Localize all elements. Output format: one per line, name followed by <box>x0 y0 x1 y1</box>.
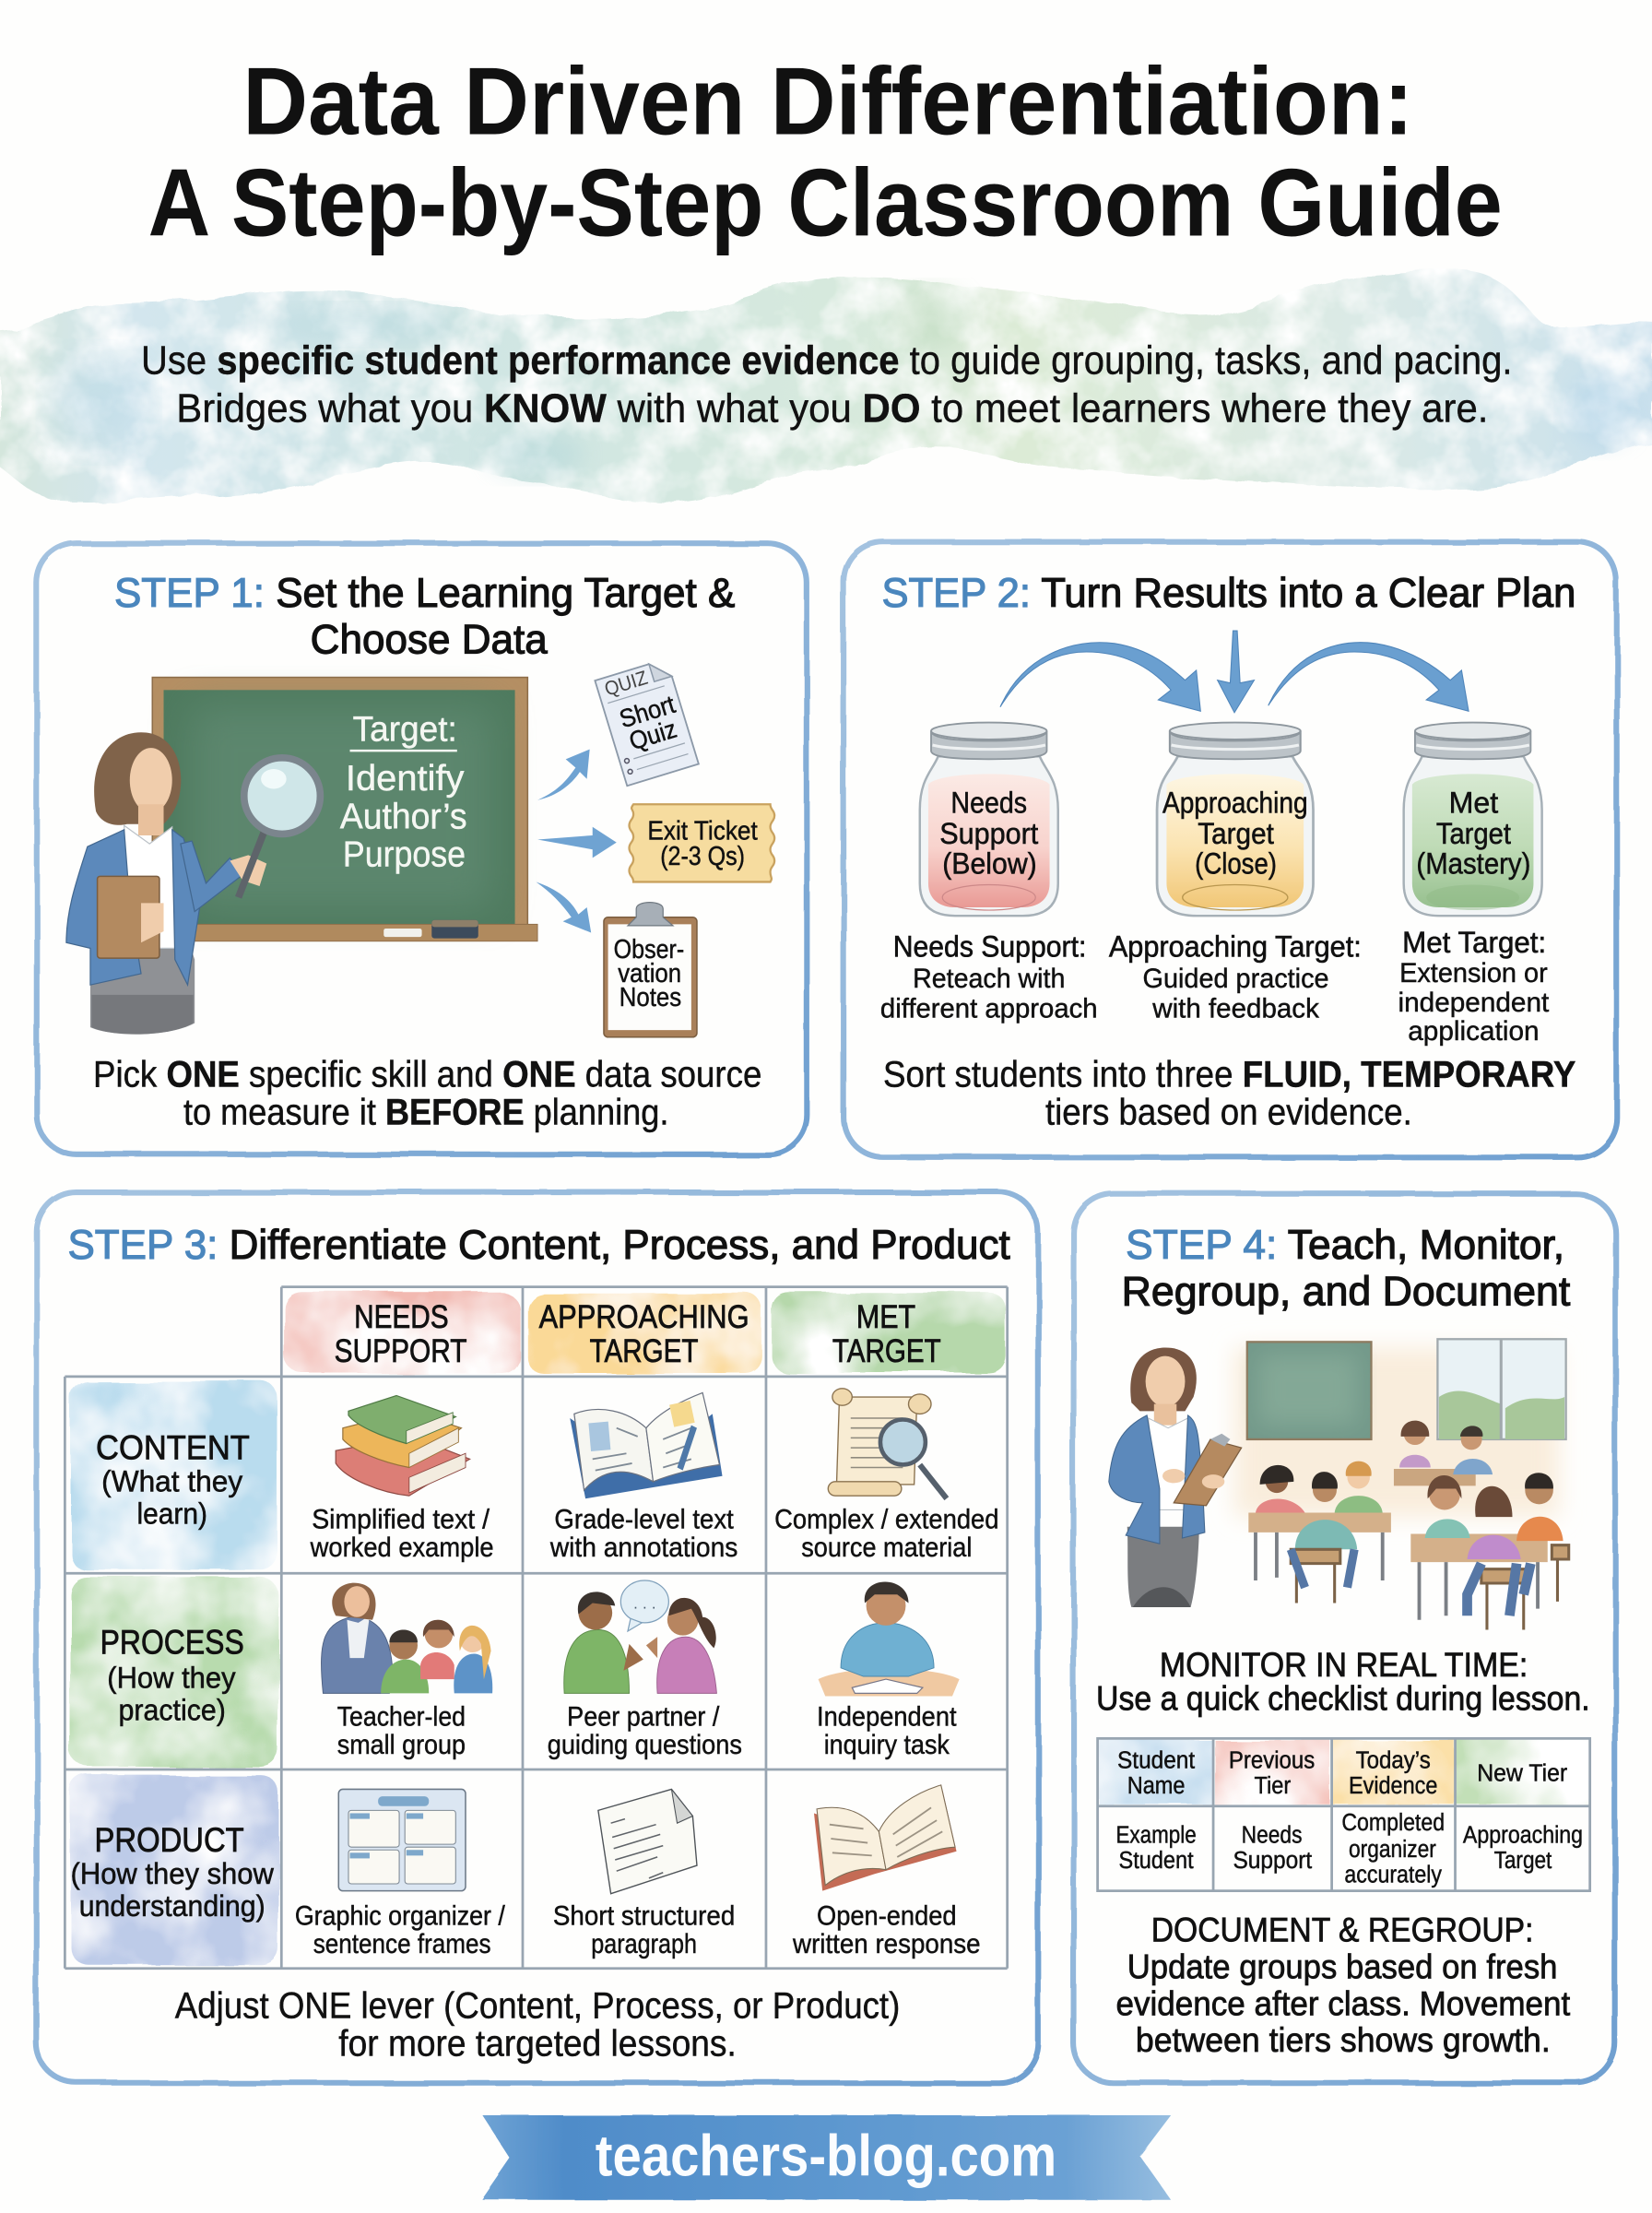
panel: step 4 <box>1074 1194 1615 2083</box>
jar: met target: Target <box>1436 817 1511 850</box>
cell captions: Grade-level text <box>554 1504 734 1534</box>
arrows between tiers <box>1000 631 1469 713</box>
arrow: to quiz <box>537 750 590 800</box>
column headers: NEEDS <box>354 1299 449 1335</box>
column headers: TARGET <box>590 1333 699 1369</box>
checklist table: Previous <box>1229 1746 1315 1773</box>
step 3 takeaway <box>175 1985 900 2065</box>
step 3 takeaway: Adjust ONE lever (Content, Process, or Product) <box>175 1985 900 2026</box>
document and regroup text: DOCUMENT & REGROUP: <box>1151 1911 1533 1949</box>
jar: needs support: Needs <box>950 786 1027 819</box>
heading: step 4 <box>1122 1223 1570 1315</box>
checklist table: Student <box>1117 1746 1196 1773</box>
cell captions: sentence frames <box>313 1929 491 1959</box>
tier description: met target: Extension or <box>1399 958 1548 988</box>
step 2 takeaway: Sort students into three FLUID, TEMPORARY <box>883 1054 1575 1095</box>
row headers: practice) <box>119 1693 226 1726</box>
row headers: understanding) <box>79 1889 266 1923</box>
checklist table: accurately <box>1344 1860 1442 1888</box>
cell captions: guiding questions <box>548 1730 742 1760</box>
checklist table: Evidence <box>1349 1771 1437 1799</box>
icon: observation notes clipboard: Obser- <box>614 934 684 964</box>
cell captions: worked example <box>310 1533 494 1563</box>
tier description: approaching target: with feedback <box>1151 993 1319 1024</box>
table: front right <box>1410 1473 1569 1630</box>
column headers: TARGET <box>832 1333 941 1369</box>
icon: graphic organizer <box>338 1789 466 1891</box>
tier description: needs support <box>880 930 1098 1024</box>
title: Data Driven Differentiation: <box>242 48 1413 155</box>
checklist table: Today’s <box>1356 1746 1431 1773</box>
panel: step 3 <box>37 1192 1038 2083</box>
icon: short quiz card: Quiz <box>626 715 680 755</box>
intro text <box>141 339 1512 432</box>
tier description: met target: application <box>1408 1016 1540 1047</box>
board text: Target: <box>353 709 457 749</box>
cell captions: source material <box>801 1533 972 1563</box>
table grid <box>65 1287 1008 1969</box>
icon: paragraph document <box>598 1789 697 1894</box>
checklist table: Example <box>1115 1821 1197 1849</box>
row headers: PROCESS <box>100 1624 244 1662</box>
heading: step 4: Regroup, and Document <box>1122 1270 1570 1315</box>
tier description: approaching target: Guided practice <box>1143 964 1329 994</box>
row headers <box>71 1381 277 1964</box>
icon: short quiz card: QUIZ <box>602 667 650 701</box>
icon: exit ticket: Exit Ticket <box>647 816 758 846</box>
heading: step 2: STEP 2: Turn Results into a Clear Plan <box>881 571 1575 616</box>
checklist table: Approaching <box>1463 1821 1583 1849</box>
icon: peer partners: ... <box>633 1595 656 1613</box>
jar: met target: Met <box>1449 786 1498 819</box>
icon: scroll with magnifier <box>828 1389 947 1498</box>
icon: teacher-led small group <box>322 1583 492 1693</box>
icon: exit ticket <box>630 804 774 882</box>
step 2 takeaway: tiers based on evidence. <box>1045 1093 1412 1133</box>
monitor heading: Use a quick checklist during lesson. <box>1096 1680 1590 1718</box>
icon: peer partners <box>564 1580 716 1693</box>
intro text: Bridges what you KNOW with what you DO to meet learners where they are. <box>176 387 1488 432</box>
icon: stacked books <box>336 1395 470 1496</box>
board text: Author’s <box>340 797 467 836</box>
title <box>148 48 1503 257</box>
cell captions: small group <box>337 1730 466 1760</box>
icon: annotated open book <box>570 1392 723 1498</box>
row headers: PRODUCT <box>95 1821 244 1859</box>
tier description: met target <box>1398 926 1550 1047</box>
cell captions: Short structured <box>553 1900 735 1931</box>
step 2 takeaway <box>883 1054 1575 1133</box>
column headers: APPROACHING <box>539 1299 749 1335</box>
chalkboard <box>152 678 537 941</box>
cell captions: Teacher-led <box>337 1702 466 1733</box>
tier description: met target: Met Target: <box>1402 926 1546 959</box>
cell captions <box>295 1504 998 1959</box>
cell captions: Graphic organizer / <box>295 1900 505 1931</box>
icon: open notebook <box>814 1785 957 1891</box>
tier description: approaching target: Approaching Target: <box>1109 930 1362 964</box>
heading: step 4: STEP 4: Teach, Monitor, <box>1126 1223 1564 1268</box>
document and regroup text: evidence after class. Movement <box>1115 1983 1571 2022</box>
tier description: needs support: Needs Support: <box>893 930 1086 964</box>
tier description: met target: independent <box>1398 988 1550 1018</box>
step 3 takeaway: for more targeted lessons. <box>338 2024 737 2065</box>
icon: short quiz card: Short <box>616 690 678 733</box>
board text <box>340 709 467 875</box>
cell captions: inquiry task <box>824 1730 950 1760</box>
icon: independent student <box>819 1581 960 1696</box>
column headers <box>285 1293 1006 1373</box>
row headers: CONTENT <box>96 1428 250 1466</box>
checklist table: Tier <box>1254 1771 1292 1799</box>
row headers: (How they show <box>71 1857 275 1890</box>
checklist table: Target <box>1494 1846 1552 1874</box>
footer banner <box>482 2115 1171 2200</box>
monitor heading: MONITOR IN REAL TIME: <box>1160 1646 1528 1684</box>
cell captions: Open-ended <box>817 1900 957 1931</box>
jar: approaching target: Target <box>1198 817 1274 850</box>
jar: needs support <box>920 723 1058 916</box>
heading: step 1: Choose Data <box>311 618 548 663</box>
table: front left <box>1248 1462 1391 1603</box>
teacher with clipboard <box>1109 1347 1242 1607</box>
jar: approaching target: Approaching <box>1162 786 1308 819</box>
board text: Purpose <box>343 835 466 875</box>
row headers: (How they <box>107 1661 236 1694</box>
illustration: classroom <box>1109 1339 1569 1630</box>
icon: teacher with magnifying glass <box>66 732 320 1035</box>
checklist table: Name <box>1127 1771 1185 1799</box>
tier description: needs support: Reteach with <box>913 964 1065 994</box>
heading: step 1 <box>114 571 735 663</box>
tier description: needs support: different approach <box>880 993 1098 1024</box>
footer banner: teachers-blog.com <box>596 2124 1056 2189</box>
checklist table: Support <box>1233 1846 1313 1874</box>
icon: exit ticket: (2-3 Qs) <box>660 841 745 870</box>
cell captions: Peer partner / <box>567 1702 720 1733</box>
checklist table: Needs <box>1242 1821 1302 1849</box>
row headers: learn) <box>136 1497 207 1531</box>
document and regroup text: between tiers shows growth. <box>1136 2020 1551 2059</box>
watercolor intro band <box>0 271 1652 503</box>
checklist table: Student <box>1119 1846 1194 1874</box>
cell captions: Complex / extended <box>774 1504 998 1534</box>
checklist table: organizer <box>1349 1835 1436 1863</box>
column headers: MET <box>856 1299 915 1335</box>
table: back <box>1394 1421 1493 1485</box>
cell captions: Simplified text / <box>312 1504 490 1534</box>
icon: short quiz card <box>595 658 699 786</box>
step 1 takeaway <box>93 1054 761 1133</box>
arrow: to exit ticket <box>537 827 617 858</box>
heading: step 1: STEP 1: Set the Learning Target & <box>114 571 735 616</box>
jar: approaching target: (Close) <box>1195 846 1277 880</box>
step 1 takeaway: Pick ONE specific skill and ONE data source <box>93 1054 761 1095</box>
cell captions: paragraph <box>591 1929 697 1959</box>
tier description: approaching target <box>1109 930 1362 1024</box>
cell captions: written response <box>792 1929 981 1959</box>
document and regroup text <box>1115 1911 1571 2059</box>
cell captions: with annotations <box>549 1533 738 1563</box>
cell captions: Independent <box>817 1702 957 1733</box>
checklist table: New Tier <box>1477 1758 1568 1786</box>
icon: observation notes clipboard <box>604 903 697 1037</box>
icon: observation notes clipboard: vation <box>618 958 681 988</box>
title: A Step-by-Step Classroom Guide <box>148 150 1503 257</box>
column headers: SUPPORT <box>335 1333 467 1369</box>
jar: needs support: (Below) <box>942 846 1037 880</box>
jar: met target: (Mastery) <box>1416 846 1530 880</box>
checklist table: Completed <box>1341 1808 1445 1836</box>
arrow: to notes <box>537 882 591 933</box>
intro text: Use specific student performance evidence to guide grouping, tasks, and pacing. <box>141 339 1512 384</box>
jar: approaching target <box>1157 723 1314 916</box>
document and regroup text: Update groups based on fresh <box>1127 1947 1557 1986</box>
heading: step 3: STEP 3: Differentiate Content, Process, and Product <box>67 1223 1010 1268</box>
panel: step 2 <box>844 542 1617 1157</box>
jar: needs support: Support <box>939 817 1038 850</box>
step 1 takeaway: to measure it BEFORE planning. <box>183 1093 668 1133</box>
board text: Identify <box>346 759 465 799</box>
differentiation table <box>65 1287 1008 1969</box>
jar: met target <box>1404 723 1542 916</box>
panel: step 1 <box>37 543 807 1154</box>
row headers: (What they <box>101 1465 242 1498</box>
icon: observation notes clipboard: Notes <box>620 982 681 1012</box>
monitor heading <box>1096 1646 1590 1718</box>
checklist table <box>1098 1738 1590 1891</box>
